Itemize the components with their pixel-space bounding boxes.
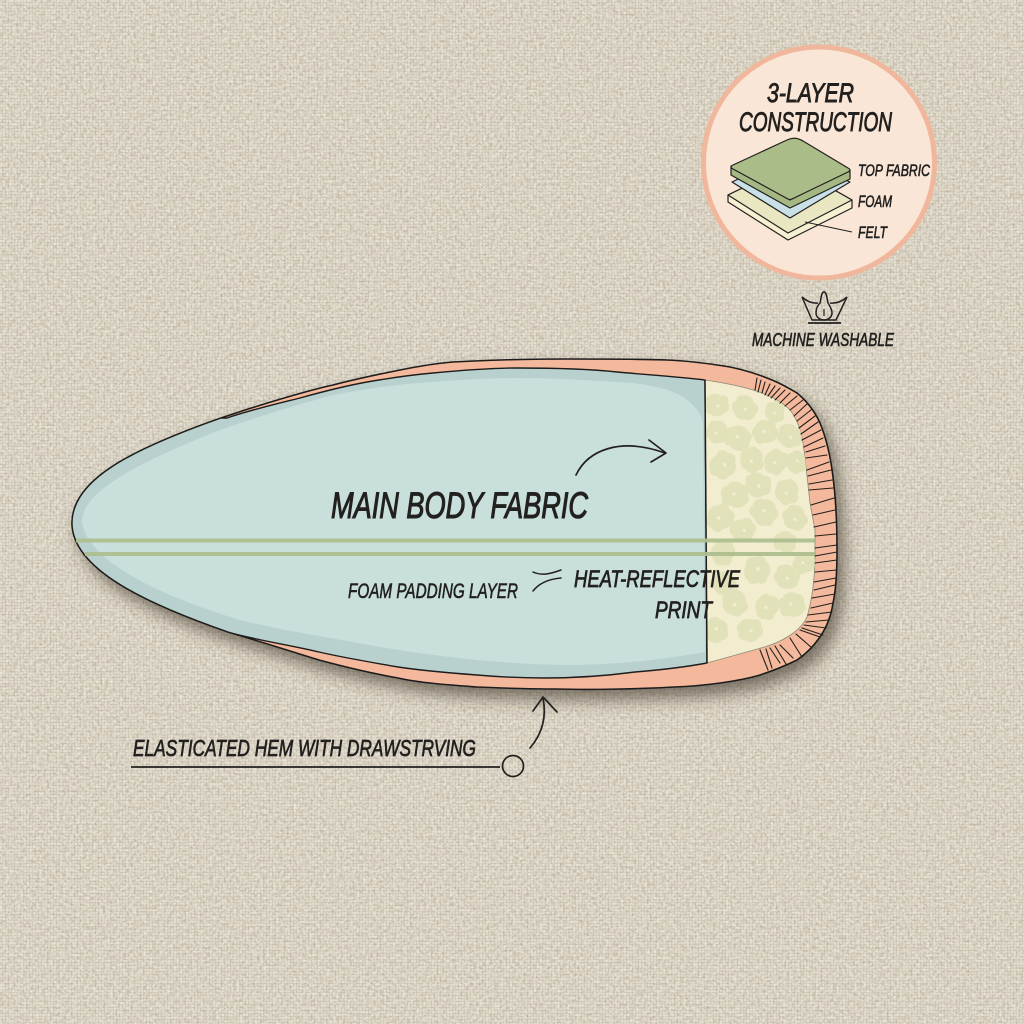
label: machine washable: MACHINE WASHABLE: [752, 330, 895, 350]
label: foam padding layer: FOAM PADDING LAYER: [348, 580, 518, 603]
panel heading: CONSTRUCTION: [739, 107, 892, 137]
main body fabric: [72, 368, 707, 678]
label: main body fabric: MAIN BODY FABRIC: [331, 485, 588, 526]
panel: 3-layer construction: [704, 47, 934, 278]
elasticated hem outer shape: [72, 359, 837, 689]
layer: foam: [732, 155, 850, 218]
leader: felt: [805, 222, 852, 232]
care: machine washable: [752, 292, 895, 350]
icon: wash tub with droplet: [802, 292, 847, 323]
gathered elastic pleats: [755, 378, 837, 670]
label: foam: FOAM: [858, 192, 893, 211]
layer stack illustration: [728, 138, 852, 240]
ironing board cover: [72, 359, 837, 689]
layer: felt: [728, 165, 852, 240]
label: heat-reflective print: PRINT: [655, 597, 714, 624]
green seam stripes: [76, 540, 815, 554]
panel heading: 3-LAYER: [767, 78, 854, 108]
panel circle: [704, 47, 934, 278]
callout text: ELASTICATED HEM WITH DRAWSTRVING: [133, 735, 476, 761]
callout: elasticated hem: [131, 697, 557, 776]
connector squiggles: [533, 570, 561, 591]
label: heat-reflective print: [574, 566, 741, 624]
leader line and ring: [131, 756, 524, 776]
arrow: to hem: [530, 697, 557, 748]
arrow: main body fabric: [576, 440, 666, 475]
panel heading: [739, 78, 892, 137]
label: heat-reflective print: HEAT-REFLECTIVE: [574, 566, 741, 593]
label: felt: FELT: [858, 223, 888, 242]
heat-reflective print panel: [699, 380, 819, 663]
label: top fabric: TOP FABRIC: [858, 161, 931, 180]
layer: top fabric: [731, 138, 850, 208]
divider between fabric and print: [705, 380, 707, 663]
